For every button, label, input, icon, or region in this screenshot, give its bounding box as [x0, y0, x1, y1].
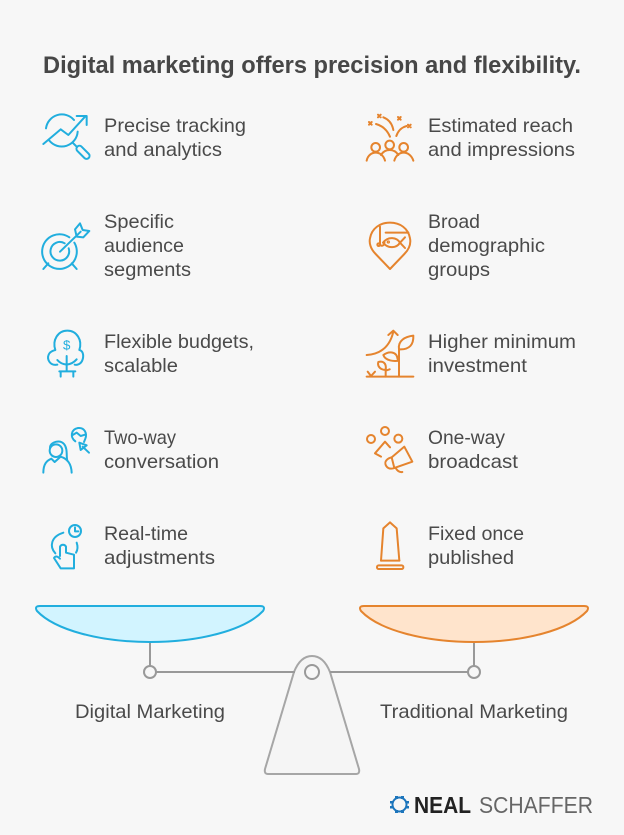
logo wordmark light: SCHAFFER [479, 792, 593, 818]
text: higher minimum investment [428, 331, 576, 377]
text: real-time adjustments [104, 523, 215, 569]
text: precise tracking: Precise tracking [104, 115, 246, 137]
text: fixed once published: published [428, 547, 514, 569]
text: fixed once published [428, 523, 524, 569]
text: specific audience segments: segments [104, 259, 191, 281]
text: specific audience segments: Specific [104, 211, 174, 233]
text: broad demographic groups: groups [428, 259, 490, 281]
right scale pan [360, 606, 588, 642]
text: broad demographic groups: Broad [428, 211, 480, 233]
text: one-way broadcast: One-way [428, 427, 505, 449]
text: fixed once published: Fixed once [428, 523, 524, 545]
icon: crowd with fireworks [367, 115, 413, 161]
label: traditional marketing: Traditional Marketing [380, 701, 568, 723]
text: higher minimum investment: Higher minimum [428, 331, 576, 353]
icon: touch with clock [52, 525, 81, 568]
left scale pan [36, 606, 264, 642]
text: real-time adjustments: adjustments [104, 547, 215, 569]
text: two-way conversation: Two-way [104, 427, 176, 449]
scale base [265, 656, 359, 774]
icon: growing plants with arrow [367, 331, 413, 377]
icon: location pin with fishing hook [370, 223, 410, 269]
text: real-time adjustments: Real-time [104, 523, 188, 545]
text: precise tracking: and analytics [104, 139, 222, 161]
icon: person in conversation [43, 428, 89, 473]
text: estimated reach [428, 115, 575, 161]
text: specific audience segments [104, 211, 191, 281]
text: precise tracking [104, 115, 246, 161]
icon: money tree: $ [63, 337, 71, 352]
text: one-way broadcast [428, 427, 519, 473]
icon: money tree [48, 331, 83, 377]
text: estimated reach: and impressions [428, 139, 575, 161]
text: broad demographic groups: demographic [428, 235, 545, 257]
text: higher minimum investment: investment [428, 355, 528, 377]
icon: obelisk [377, 522, 403, 569]
text: specific audience segments: audience [104, 235, 184, 257]
text: one-way broadcast: broadcast [428, 451, 519, 473]
text: flexible budgets: scalable [104, 355, 178, 377]
text: two-way conversation [104, 427, 219, 473]
text: estimated reach: Estimated reach [428, 115, 573, 137]
title: Digital marketing offers precision and flexibility. [43, 52, 581, 79]
text: flexible budgets: Flexible budgets, [104, 331, 254, 353]
text: flexible budgets [104, 331, 254, 377]
text: two-way conversation: conversation [104, 451, 219, 473]
icon: target with arrow [42, 223, 89, 269]
scale beam and pivots [144, 642, 480, 679]
logo [390, 792, 593, 818]
icon: megaphone broadcast [367, 427, 412, 472]
text: broad demographic groups [428, 211, 545, 281]
label: digital marketing: Digital Marketing [75, 701, 225, 723]
icon: magnifier with trend arrow [43, 114, 91, 160]
logo wordmark: NEAL [414, 792, 471, 818]
logo icon [390, 796, 409, 813]
